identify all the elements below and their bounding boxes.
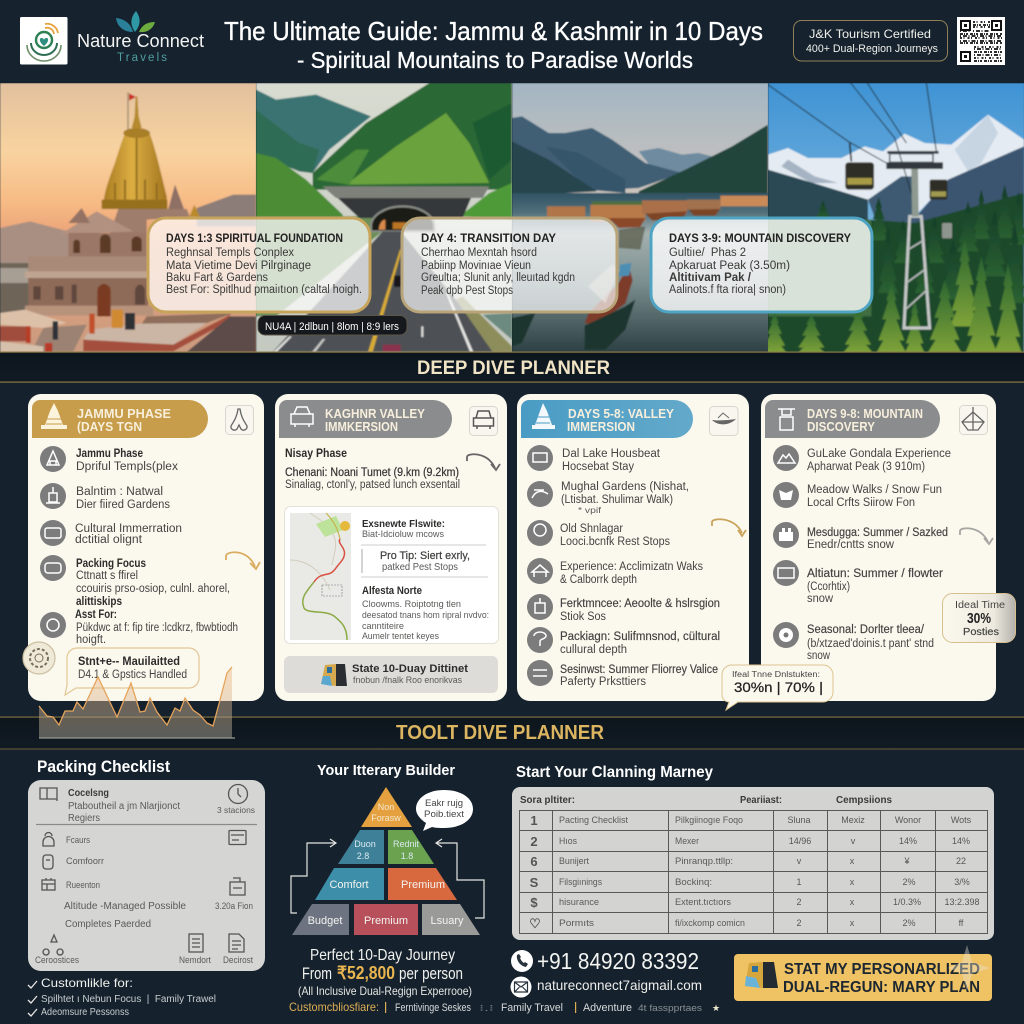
pricing text: (All Inclusive Dual-Regign Experrooe) <box>298 984 472 998</box>
card header: days 5-8: IMMERSION <box>567 419 635 434</box>
photo: Chenani-Nashri tunnel and highway <box>256 83 513 353</box>
table rows: Bockinq: <box>675 877 712 888</box>
logo: Nature Connect Travels: Nature Connect <box>77 31 204 51</box>
panel: planning table: Sora pltiter: <box>520 795 575 806</box>
title <box>224 16 763 73</box>
text: valley activities: (Ltisbat. Shulimar Walk) <box>561 494 673 506</box>
text: valley activities: Stiok Sos <box>560 611 606 623</box>
pricing text: per person <box>399 964 463 983</box>
checklist text <box>35 788 255 966</box>
customization strip: Adventure <box>583 1002 632 1014</box>
text: transit phase: Nisay Phase <box>285 448 347 460</box>
card header: days 5-8 <box>521 400 693 438</box>
table rows: Pilkgiinogıe Foqo <box>675 815 743 826</box>
card header: days 9-8 mountain <box>765 400 940 438</box>
text: valley activities: Packiagn: Sulifmnsnod, cültural <box>560 631 720 643</box>
text: Jammu phase details: alittiskips <box>76 596 122 608</box>
panel: packing checklist <box>28 780 265 971</box>
pricing text <box>298 947 472 998</box>
customizable for list: Spilhtet ı Nebun Focus | Family Trawel <box>41 994 216 1005</box>
table rows: 2 <box>796 918 802 928</box>
panel: planning table: Cempsiions <box>836 795 892 806</box>
panel: planning table: Peariiast: <box>740 795 782 806</box>
table rows: 6 <box>530 854 538 869</box>
text: mountain activities: GuLake Gondala Experience <box>807 448 951 460</box>
sparkle <box>948 945 990 991</box>
text: Jammu phase details: Pükdwc at f: fip tire :lcdkrz, fbwbtiodh <box>76 622 238 634</box>
icon: car <box>470 406 498 436</box>
table rows: Extent.tıctıors <box>675 897 731 908</box>
route map box <box>284 506 498 644</box>
checklist text: Cocelsng <box>68 788 109 799</box>
certification badge: 400+ Dual-Region Journeys <box>806 43 938 55</box>
bottom banner: state 10-day checklist <box>284 656 498 693</box>
section band: deep dive planner: DEEP DIVE PLANNER <box>417 358 610 379</box>
info card: days 3-9 mountain discovery: Altitıivam Pak / <box>669 272 752 284</box>
customization strip: Customcbliosfiare: <box>289 1000 379 1014</box>
table rows: 3/% <box>954 877 970 887</box>
text: Jammu phase details <box>75 448 238 646</box>
table rows: S <box>530 875 539 890</box>
text: mountain activities: Enedr/cntts snow <box>807 539 895 551</box>
badge: group icon <box>23 642 55 674</box>
checklist text: Comfoorr <box>66 856 104 867</box>
table grid <box>519 810 988 934</box>
pricing text: Perfect 10-Day Journey <box>310 947 455 964</box>
pyramid diagram: itinerary builder: Forasw <box>371 813 401 823</box>
text: valley activities: Paferty Prksttiers <box>560 676 646 688</box>
panel: valley immersion <box>517 394 749 701</box>
text: valley activities: Sesinwst: Summer Fliorrey Valice <box>560 664 718 676</box>
logo: Nature Connect Travels: Travels <box>117 52 167 64</box>
heading: packing checklist: Packing Checklist <box>37 757 170 776</box>
pyramid diagram: itinerary builder: Lsuary <box>430 915 464 927</box>
text: transit phase: Chenani: Noani Tumet (9.km (9.2km) <box>285 467 459 479</box>
table rows: $ <box>530 895 538 910</box>
card header: Kashmir valley: IMMKERSION <box>325 419 398 434</box>
checklist text: Nemdort <box>179 955 211 966</box>
table rows: Pormıts <box>559 918 594 929</box>
checklist text: 3.20a Fion <box>215 901 253 912</box>
info card: days 1-3 spiritual foundation: Best For: Spitlhud pmaiıtıon (caltal hoigh. <box>166 284 362 296</box>
checklist text: 3 stacions <box>217 806 255 815</box>
panel: Jammu phase <box>28 394 264 701</box>
speech bubble: Eakr rujg <box>425 798 463 808</box>
info card: day 4 transition day: Peak dpb Pest Stops <box>421 285 513 297</box>
contact: email: natureconnect7aigmail.com <box>537 977 702 993</box>
table rows: x <box>850 918 855 928</box>
callout: ideal time 30%: 30% <box>967 610 991 627</box>
table rows: v <box>851 836 856 846</box>
table rows: 14% <box>899 836 917 846</box>
table rows: 14/96 <box>789 836 811 846</box>
card header: days 9-8 mountain: DAYS 9-8: MOUNTAIN <box>807 406 923 421</box>
customization strip: ★ <box>712 1003 720 1013</box>
text: Jammu phase details: dctitial olignt <box>75 534 143 546</box>
pyramid diagram: itinerary builder: 2.8 <box>357 851 369 861</box>
text: mountain activities: (b/xtzaed'doinis.t pant' stnd <box>807 638 934 650</box>
card header: Jammu phase: (DAYS TGN <box>77 419 142 434</box>
section band: deep dive planner <box>0 352 1024 383</box>
header bar <box>0 0 1024 82</box>
text: Jammu phase details: Packing Focus <box>76 558 146 570</box>
bottom banner: state 10-day checklist: State 10-Duay Dittinet <box>352 663 468 675</box>
customization strip <box>289 1000 720 1014</box>
table rows: hisurance <box>559 897 599 908</box>
checklist text: Fcaurs <box>66 835 90 846</box>
checklist text: Altitude -Managed Possible <box>64 901 186 912</box>
section band: tool dive planner <box>0 716 1024 750</box>
callout: ideal time distribution: Ifeal Tnne Dnlstukten: <box>732 670 820 679</box>
pyramid diagram: itinerary builder: Rednit <box>393 839 420 849</box>
speech bubble: Poib.tiext <box>424 809 465 819</box>
QR code <box>957 17 1005 65</box>
table rows: Pacting Checklist <box>559 815 628 826</box>
section band: tool dive planner: TOOLT DIVE PLANNER <box>396 722 605 744</box>
title: - Spiritual Mountains to Paradise Worlds <box>297 47 693 73</box>
icon: praying hands <box>226 406 254 434</box>
customization strip: 4t fasspprtaes <box>638 1003 703 1013</box>
row icons <box>773 445 799 648</box>
contact: email <box>510 976 702 998</box>
callout: ideal time 30% <box>942 594 1016 642</box>
text: valley activities: Old Shnlagar <box>560 523 623 535</box>
callout: ideal time 30%: Posties <box>963 627 999 638</box>
customization strip: Ferntivinge Seskes <box>395 1002 471 1014</box>
table rows <box>529 813 980 931</box>
icon: shikara boat <box>710 406 738 436</box>
text: Jammu phase details: ccouiris prso-osiop, culnl. ahorel, <box>76 583 230 595</box>
text: valley activities: Looci.bcnfk Rest Stops <box>560 536 670 548</box>
table rows: Filsgiınings <box>559 877 602 888</box>
text: valley activities: Dal Lake Housbeat <box>562 448 661 460</box>
text: route notes: Alfesta Norte <box>362 585 422 597</box>
table rows: ¥ <box>903 856 910 866</box>
customization strip: Family Travel <box>501 1002 563 1014</box>
row icons <box>527 445 553 686</box>
text: Jammu phase details: Cultural Immerration <box>75 523 182 535</box>
info card: days 3-9 mountain discovery: Apkaruat Peak (3.50m) <box>669 260 790 272</box>
photo: Jammu temple at sunset <box>0 83 257 353</box>
info card: days 1-3 spiritual foundation: Mata Vietime Devi Pilrginage <box>166 260 311 272</box>
text: mountain activities: snow <box>807 593 834 605</box>
call to action button: STAT MY PERSONARLIZED <box>784 961 980 978</box>
pyramid diagram: itinerary builder: Premium <box>364 915 408 927</box>
table rows: Mexer <box>675 836 699 847</box>
info card: days 1-3 spiritual foundation <box>148 218 370 312</box>
text: mountain activities: (Ccorhtix) <box>807 581 850 593</box>
table rows: Sluna <box>787 815 811 825</box>
call to action button: DUAL-REGUN: MARY PLAN <box>783 979 980 996</box>
info card: days 3-9 mountain discovery <box>651 218 872 312</box>
table rows: ♡ <box>529 916 541 931</box>
info card: day 4 transition day: Cherrhao Mexntah hsord <box>421 247 537 259</box>
photo: Gulmarg gondola and pine forest <box>763 83 1024 355</box>
altitude line chart <box>39 667 235 738</box>
table rows: 1 <box>530 813 538 828</box>
table rows: 22 <box>956 856 966 866</box>
checklist icons <box>40 784 248 955</box>
table rows: Wots <box>951 815 972 825</box>
text: route notes: Pro Tip: Siert exrly, <box>380 550 470 562</box>
pyramid diagram: itinerary builder: Comfort <box>329 879 369 891</box>
text: Jammu phase details: Balntim : Natwal <box>76 486 163 498</box>
pyramid diagram: itinerary builder: Budget <box>308 915 342 927</box>
route stats pill: NU4A | 2dlbun | 8lom | 8:9 lers <box>265 321 399 333</box>
table rows: 1/0.3% <box>893 897 921 907</box>
info card: days 1-3 spiritual foundation: Reghnsal Templs Conplex <box>166 247 294 259</box>
text: route notes: patked Pest Stops <box>382 562 458 573</box>
text: transit phase <box>285 448 460 491</box>
customizable for list: Customlikle for: <box>41 976 133 990</box>
pyramid diagram: itinerary builder <box>291 787 484 935</box>
info card: days 1-3 spiritual foundation: DAYS 1:3 SPIRITUAL FOUNDATION <box>166 233 343 245</box>
text: route notes: Exsnewte Flswite: <box>362 519 445 530</box>
text: route notes <box>361 519 489 642</box>
text: Jammu phase details: hoigft. <box>76 634 106 646</box>
table rows: 1 <box>796 877 802 887</box>
panel: planning table <box>512 787 994 940</box>
map <box>290 513 351 640</box>
info card: days 3-9 mountain discovery: Gultiıe/ Phas 2 <box>669 247 746 259</box>
table rows: v <box>797 856 802 866</box>
photo: Dal Lake houseboats <box>512 83 769 353</box>
text: valley activities: Mughal Gardens (Nishat, <box>561 481 689 493</box>
checklist text: Rueenton <box>66 880 100 891</box>
text: mountain activities: snow <box>807 650 831 662</box>
text: mountain activities <box>807 448 951 662</box>
table rows: 2 <box>796 897 802 907</box>
info card: days 1-3 spiritual foundation: Baku Fart & Gardens <box>166 272 268 284</box>
callout: ideal time distribution <box>722 665 833 710</box>
title: The Ultimate Guide: Jammu & Kashmir in 10 Days <box>224 16 763 46</box>
text: valley activities: Experience: Acclimizatn Waks <box>560 561 703 573</box>
card header: Kashmir valley <box>279 400 452 438</box>
checklist text: Decirost <box>223 955 253 966</box>
text: mountain activities: Local Crfts Siirow Fon <box>807 497 915 509</box>
table rows: Pinranqp.ttllp: <box>675 856 733 867</box>
info card: days 3-9 mountain discovery: DAYS 3-9: MOUNTAIN DISCOVERY <box>669 233 851 245</box>
icon: gondola diamond <box>960 406 988 434</box>
heading: start planning: Start Your Clanning Marney <box>516 764 713 781</box>
text: mountain activities: Meadow Walks / Snow Fun <box>807 484 942 496</box>
card header: days 5-8: DAYS 5-8: VALLEY <box>568 406 674 421</box>
arrow: gold curve <box>712 519 746 536</box>
text: valley activities <box>560 448 720 688</box>
checklist text: Regiers <box>68 813 100 824</box>
text: valley activities: Ferktmncee: Aeoolte & hslrsgion <box>560 598 720 610</box>
row icons <box>40 446 66 638</box>
logo: Nature Connect Travels <box>20 11 204 64</box>
text: valley activities: Hocsebat Stay <box>562 461 634 473</box>
text: Jammu phase details: Asst For: <box>75 609 117 621</box>
info card: days 3-9 mountain discovery: Aalinots.f fta riora| snon) <box>669 284 786 296</box>
text: Jammu phase details: Dier fiired Gardens <box>76 499 170 511</box>
customization strip: ⁝.⁝ <box>479 1003 494 1013</box>
customizable for list <box>28 976 216 1018</box>
text: route notes: Aumelr tentet keyes <box>362 631 439 642</box>
checklist text: Ceroostices <box>35 955 79 966</box>
table rows: 2% <box>902 918 916 928</box>
panel: mountain discovery <box>761 394 996 701</box>
text: route notes: deesatod tnans hom ripral nvdvo: <box>362 610 489 621</box>
contact: phone: +91 84920 83392 <box>537 948 699 974</box>
arrow: gold curve <box>226 552 260 569</box>
table rows: 14% <box>952 836 970 846</box>
table rows: x <box>850 897 855 907</box>
info card: day 4 transition day: Greultıa; Slunit anly, lleuıtad kgdn <box>421 272 575 284</box>
table rows: 13:2.398 <box>944 897 980 907</box>
call to action button <box>734 954 992 1001</box>
text: Jammu phase details: Jammu Phase <box>76 448 143 460</box>
text: route notes: Cloowms. Roiptotng tlen <box>362 599 461 610</box>
table rows: Wonor <box>895 815 921 825</box>
table rows: Mexiz <box>841 815 865 825</box>
pyramid diagram: itinerary builder: Non <box>378 802 394 812</box>
table rows: 2% <box>902 877 916 887</box>
text: valley activities: cullural depth <box>560 644 627 656</box>
text: route notes: Biat-Idcioluw mcows <box>362 529 444 540</box>
callout: state-maintained <box>65 648 199 695</box>
table rows: Hıos <box>559 836 577 847</box>
arrow: gray curve <box>960 528 993 544</box>
text: valley activities: * vpif <box>578 506 602 515</box>
route stats pill <box>258 316 407 335</box>
pricing text: ₹52,800 <box>337 963 395 983</box>
pyramid diagram: itinerary builder: Duon <box>354 839 376 849</box>
text: Jammu phase details: Cttnatt s ffirel <box>76 570 138 582</box>
certification badge: J&K Tourism Certified <box>809 27 931 41</box>
card header: Jammu phase: JAMMU PHASE <box>77 406 171 421</box>
callout: ideal time 30%: Ideal Time <box>955 600 1005 611</box>
pricing text: From <box>302 964 332 983</box>
table rows: x <box>850 856 855 866</box>
speech bubble <box>416 790 473 831</box>
text: valley activities: & Calborrk depth <box>560 574 637 586</box>
checklist text: Ptaboutheil a jm Nlarjionct <box>68 801 180 812</box>
info card: day 4 transition day: Pabiinp Movinıae Vieun <box>421 260 531 272</box>
heading: itinerary builder: Your Itterary Builder <box>317 762 455 779</box>
info card: day 4 transition day: DAY 4: TRANSITION DAY <box>421 233 556 245</box>
table rows: fi/ixckomp comicn <box>675 918 745 929</box>
table rows: ff <box>959 918 964 928</box>
card header: days 9-8 mountain: DISCOVERY <box>807 419 875 434</box>
text: route notes: canntiteire <box>362 621 404 632</box>
certification badge <box>794 20 948 61</box>
text: transit phase: Sinaliag, ctonl'y, patsed lunch exsentail <box>285 479 460 491</box>
text: mountain activities: Seasonal: Dorlter tleea/ <box>807 624 925 636</box>
customizable for list: Adeomsure Pessonss <box>41 1007 129 1018</box>
callout: ideal time distribution: 30%n | 70% | <box>734 679 823 695</box>
table rows: Bunijert <box>559 856 589 867</box>
checklist text: Completes Paerded <box>65 919 151 930</box>
table rows: 2 <box>530 834 538 849</box>
text: mountain activities: Apharwat Peak (3 910m) <box>807 461 925 473</box>
arrow: gray curve <box>467 454 500 470</box>
bottom banner: state 10-day checklist: fnobun /fnalk Roo enorikvas <box>353 675 462 685</box>
card header: Jammu phase <box>32 400 208 438</box>
pyramid diagram: itinerary builder: Premium <box>401 879 445 891</box>
callout: state-maintained: Stnt+e-- Mauilaitted <box>78 656 180 668</box>
panel: Kashmir valley immersion <box>275 394 507 701</box>
text: Jammu phase details: Dpriful Templs(plex <box>76 461 178 473</box>
pyramid diagram: itinerary builder: 1.8 <box>401 851 413 861</box>
info card: day 4 transition day <box>402 218 617 312</box>
card header: Kashmir valley: KAGHNR VALLEY <box>325 406 425 421</box>
text: mountain activities: Altiatun: Summer / flowter <box>807 568 943 580</box>
text: mountain activities: Mesdugga: Summer / Sazked <box>807 527 948 539</box>
table rows: x <box>850 877 855 887</box>
callout: state-maintained: D4.1 & Gpstics Handled <box>78 669 187 681</box>
